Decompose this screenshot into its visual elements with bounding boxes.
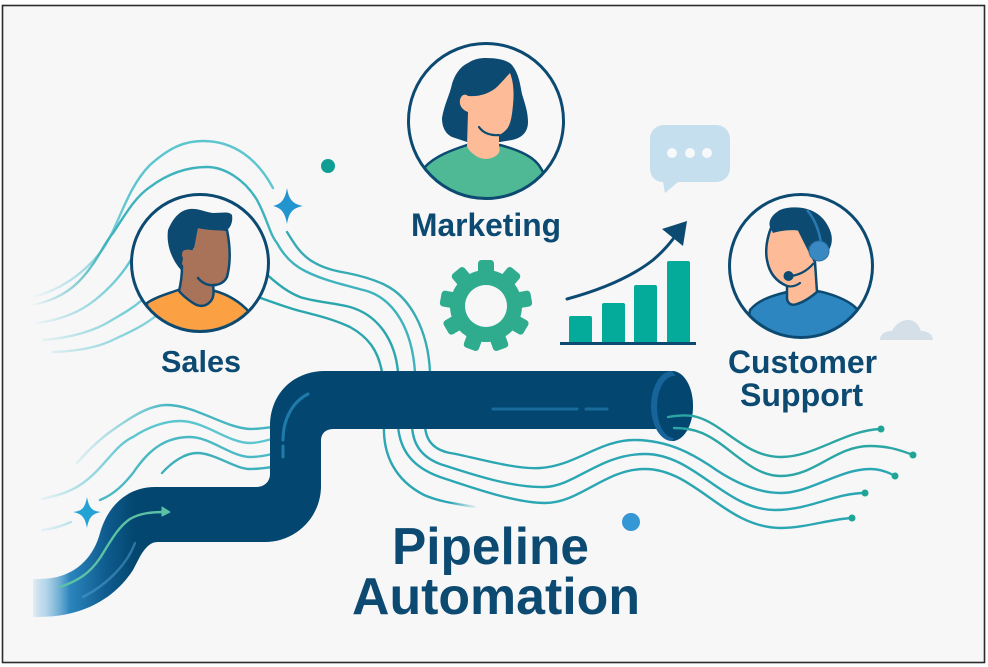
label: marketing: Marketing [411,207,561,243]
pipe opening [651,371,693,441]
pipeline [33,371,693,617]
title: Pipeline [392,518,589,576]
label: customer support: Customer [728,344,877,380]
teal dot [321,159,335,173]
icon: sparkle upper [273,188,303,224]
avatar: sales [132,194,268,340]
label: customer support: Support [740,377,863,413]
title: Automation [352,568,640,626]
flow lines: lower left into pipe [42,405,272,530]
icon: chat bubble [650,125,730,193]
chart: rising bars with arrow [560,221,696,344]
stream end dots [848,426,916,522]
icon: sparkle lower [73,497,101,528]
blue dot [622,513,640,531]
icon: gear [439,260,533,352]
title [352,518,640,626]
avatar: customer support [730,194,872,345]
pipe highlights [83,394,607,597]
pipe inner arrow [60,507,170,587]
flow lines: upper left into pipe [33,141,430,372]
icon: cloud [880,320,933,340]
outflow streams from pipe opening [668,416,913,476]
label: customer support [728,344,877,413]
avatar: marketing [408,44,564,210]
flow lines: under pipe to the right [384,426,895,528]
label: sales: Sales [161,344,241,379]
